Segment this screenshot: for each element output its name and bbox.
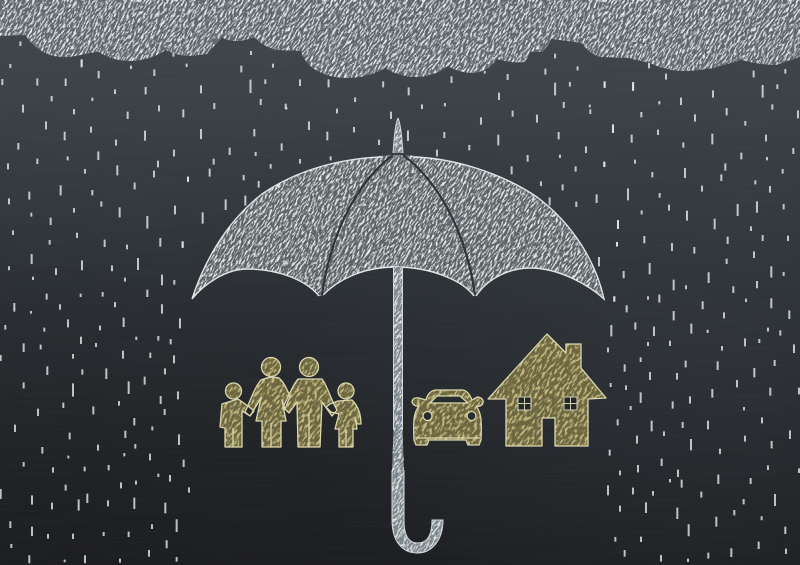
house windows [518, 397, 577, 410]
rain: under the clouds [20, 41, 649, 109]
rain: lower right [608, 308, 799, 562]
storm cloud [0, 0, 800, 80]
family, car and house in gold chalk [215, 330, 610, 450]
rain: upper left [2, 60, 188, 310]
family of four [220, 358, 361, 447]
umbrella ribs [322, 155, 475, 295]
umbrella [185, 110, 610, 560]
rain: upper right [604, 69, 798, 309]
rain: around the canopy [183, 107, 618, 302]
car [412, 390, 483, 445]
umbrella canopy [185, 150, 610, 305]
house [488, 334, 606, 446]
rain: lower left [1, 308, 189, 563]
umbrella spike, shaft and hook handle [392, 118, 444, 554]
